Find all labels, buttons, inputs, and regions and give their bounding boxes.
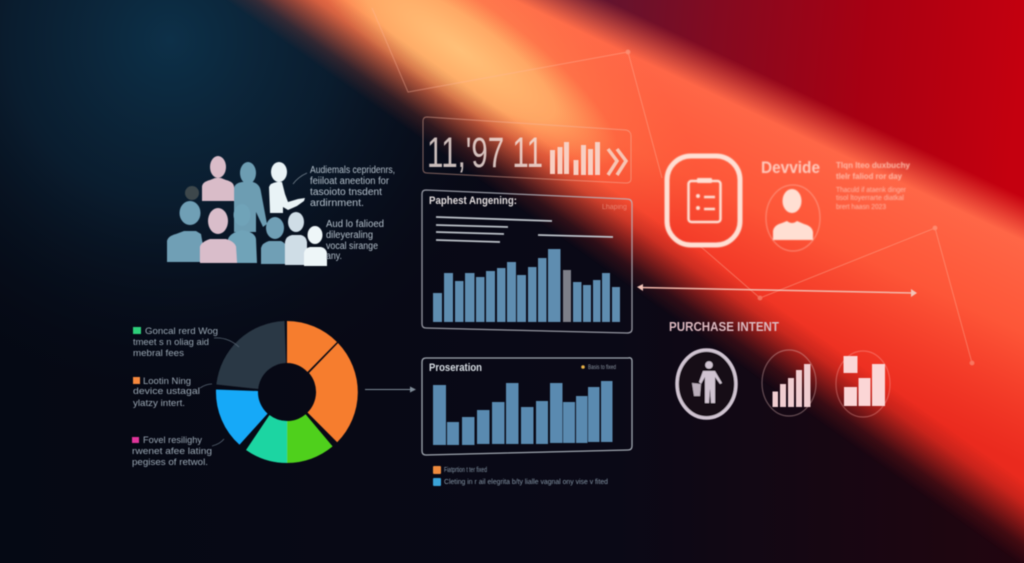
device description text: tisol ltoyerrarte diatkal — [836, 195, 904, 202]
icon: rising bars in circle — [762, 350, 816, 416]
chart key — [581, 364, 616, 371]
segment: blue — [216, 390, 268, 445]
person: back pink — [202, 156, 234, 201]
audience description text: dileyeraling — [326, 230, 373, 241]
donut chart — [216, 321, 358, 463]
person: white front — [304, 226, 327, 266]
legend item: green: tmeet s n oliag aid — [133, 337, 209, 348]
person: front pink — [200, 208, 237, 263]
segment: orange upper — [287, 321, 337, 372]
legend item: pink: rwenet afee lating — [132, 446, 212, 457]
legend item: green: mebral fees — [133, 348, 184, 359]
person: middle teal — [228, 204, 257, 263]
device description text: Thaculd if ataenk dinger — [836, 187, 907, 194]
audience description text: ardirnment. — [310, 198, 364, 209]
chart panel: top bar chart — [422, 190, 632, 333]
icon: block chart in circle — [836, 351, 890, 417]
bars — [433, 249, 620, 322]
mini bars — [550, 142, 600, 175]
device description text: brert haasn 2023 — [836, 204, 886, 211]
segment: orange right — [308, 343, 358, 442]
bottom legend: Fiatprtion t ter fixed — [444, 467, 487, 474]
segment: green — [287, 414, 333, 463]
chart title: Paphest Angening: — [429, 195, 517, 207]
device description text — [836, 160, 910, 211]
audience description text: vocal sirange — [326, 241, 378, 252]
audience description text: feiiloat aneetion for — [310, 176, 390, 187]
device description text: Tlqn lteo duxbuchy — [836, 160, 910, 170]
chart title: Proseration — [429, 362, 482, 374]
metric panel: big number — [423, 117, 631, 183]
arrow: donut to chart — [365, 386, 416, 392]
horizontal double arrow — [637, 284, 917, 297]
icon: shopper in ring — [677, 350, 736, 418]
legend item: orange: ylatzy intert. — [133, 398, 185, 409]
legend item: orange: Lootin Ning — [143, 376, 191, 387]
person: standing teal — [234, 162, 267, 232]
bottom legend — [433, 466, 608, 486]
chart key: Basis to fixed — [588, 364, 616, 371]
legend item: pink: pegises of retwol. — [132, 457, 208, 468]
person: light blue — [285, 212, 307, 265]
person: presenter — [269, 162, 305, 213]
network connector lines — [372, 8, 974, 365]
segment: teal — [246, 415, 287, 463]
audience description text: Audiemals cepridenrs, — [310, 165, 395, 176]
chevrons — [608, 149, 626, 175]
person: front teal right — [261, 217, 287, 264]
chart panel: Proseration bar chart — [422, 358, 632, 455]
legend item: orange — [133, 376, 212, 409]
legend item: green — [133, 326, 239, 359]
chart tag: Lhaping — [602, 204, 627, 211]
person: faded back circle — [185, 186, 199, 200]
icon: clipboard in rounded square — [667, 156, 740, 245]
audience description text: Aud lo falioed — [326, 219, 384, 230]
audience description text — [293, 165, 395, 262]
legend item: pink: Fovel resilighy — [143, 435, 202, 446]
bars — [433, 381, 612, 445]
metric value: 11,'97 11 — [427, 129, 543, 177]
icon: person in circle — [766, 185, 820, 251]
audience description text: tasoioto tnsdent — [310, 187, 382, 198]
legend item: orange: device ustagal — [133, 386, 200, 397]
summary lines — [436, 217, 613, 242]
clipboard — [688, 178, 720, 222]
legend item: green: Goncal rerd Wog — [145, 326, 218, 337]
heading: Devvide: Devvide — [761, 158, 820, 177]
legend item: pink — [132, 435, 224, 468]
heading: Purchase Intent: PURCHASE INTENT — [669, 320, 779, 334]
audience group icon — [167, 156, 327, 266]
device description text: tlelr faliod ror day — [836, 171, 902, 181]
person: front left teal — [167, 201, 206, 262]
bottom legend: Cleting in r ail elegrita b/ty lialle vagnal ony vise v fited — [444, 479, 608, 486]
segment: dark slate — [216, 321, 286, 389]
donut legend — [132, 326, 239, 468]
audience description text: any. — [326, 251, 342, 262]
